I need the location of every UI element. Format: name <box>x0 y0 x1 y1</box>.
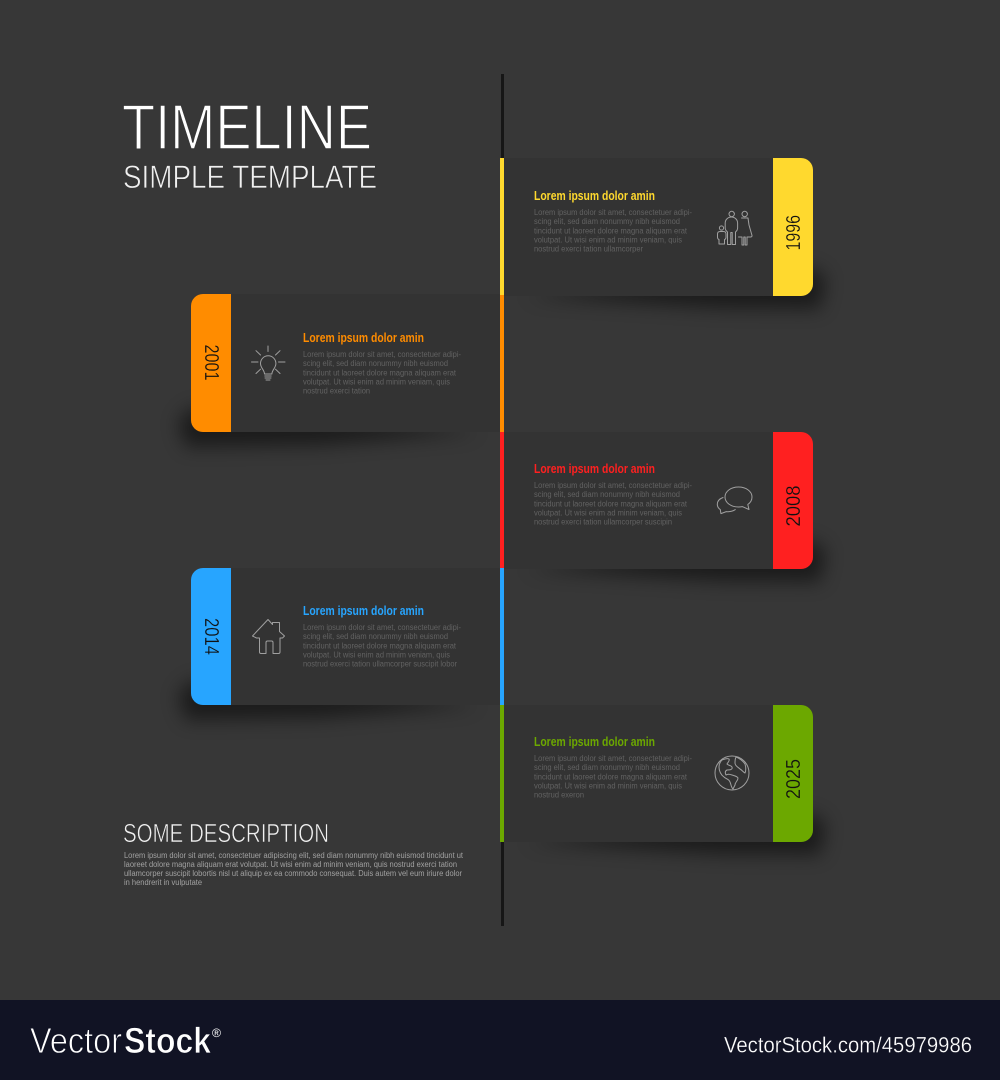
logo: VectorStock: ® <box>212 1026 221 1040</box>
text block: 2001 <box>303 350 461 396</box>
text block: 2014: volutpat. Ut wisi enim ad minim veniam, quis <box>303 650 450 660</box>
heading: 2025: Lorem ipsum dolor amin <box>534 735 655 749</box>
logo: VectorStock <box>30 1020 221 1061</box>
year tab: 2001 <box>191 294 231 432</box>
text block: 2025: scing elit, sed diam nonummy nibh euismod <box>534 763 680 772</box>
text block: 2008: tincidunt ut laoreet dolore magna aliquam erat <box>534 500 688 508</box>
description heading: SOME DESCRIPTION <box>123 818 329 848</box>
text block: 2001: nostrud exerci tation <box>303 386 370 396</box>
icon: speech bubbles <box>717 487 752 514</box>
text block: 2014: Lorem ipsum dolor sit amet, consectetuer adipi- <box>303 623 461 632</box>
year tab: 2001: 2001 <box>200 344 222 380</box>
text block: 2025: tincidunt ut laoreet dolore magna aliquam erat <box>534 772 688 782</box>
description text: in hendrerit in vulputate <box>124 878 203 887</box>
text block: 1996: Lorem ipsum dolor sit amet, consectetuer adipi- <box>534 208 692 217</box>
panel: 1996 <box>504 158 826 309</box>
text block: 2014: scing elit, sed diam nonummy nibh euismod <box>303 632 448 641</box>
text block: 1996: nostrud exerci tation ullamcorper <box>534 244 643 254</box>
icon: light bulb <box>252 346 285 380</box>
text block: 2014 <box>303 623 461 668</box>
description text: ullamcorper suscipit lobortis nisl ut aliquip ex ea commodo consequat. Duis autem vel eum iriure dolor <box>124 869 462 878</box>
logo: VectorStock: Stock <box>124 1020 212 1061</box>
text block: 2025: Lorem ipsum dolor sit amet, consectetuer adipi- <box>534 754 692 763</box>
text block: 1996: tincidunt ut laoreet dolore magna aliquam erat <box>534 226 688 236</box>
heading: 2001: Lorem ipsum dolor amin <box>303 331 424 345</box>
icon: globe <box>715 756 749 790</box>
year tab: 1996 <box>773 158 813 296</box>
text block: 2025 <box>534 754 692 800</box>
year tab: 2025: 2025 <box>783 759 805 799</box>
year tab: 2008 <box>773 432 813 569</box>
year tab: 2025 <box>773 705 813 842</box>
heading: 2014: Lorem ipsum dolor amin <box>303 604 424 618</box>
text block: 2008: volutpat. Ut wisi enim ad minim veniam, quis <box>534 508 682 518</box>
text block: 2008 <box>534 481 692 526</box>
panel: 2001 <box>178 294 500 447</box>
year tab: 2014 <box>191 568 231 705</box>
heading: 2008: Lorem ipsum dolor amin <box>534 462 655 476</box>
text block: 2001: volutpat. Ut wisi enim ad minim veniam, quis <box>303 378 450 386</box>
title: SIMPLE TEMPLATE <box>123 159 377 195</box>
logo: VectorStock: Vector <box>30 1020 122 1061</box>
text block: 2008: nostrud exerci tation ullamcorper suscipin <box>534 518 672 526</box>
panel: 2008 <box>504 432 826 582</box>
text block: 2014: nostrud exerci tation ullamcorper suscipit lobor <box>303 660 457 668</box>
description text: laoreet dolore magna aliquam erat volutpat. Ut wisi enim ad minim veniam, quis nostrud exerci tation <box>124 860 457 869</box>
text block: 1996: volutpat. Ut wisi enim ad minim veniam, quis <box>534 236 682 244</box>
text block: 2008: Lorem ipsum dolor sit amet, consectetuer adipi- <box>534 481 692 490</box>
icon: family <box>718 211 752 245</box>
text block: 2001: Lorem ipsum dolor sit amet, consectetuer adipi- <box>303 350 461 359</box>
heading: 1996: Lorem ipsum dolor amin <box>534 189 655 203</box>
year tab: 1996: 1996 <box>783 215 805 250</box>
panel: 2025 <box>504 705 826 855</box>
image id url: VectorStock.com/45979986 <box>724 1032 972 1058</box>
description text <box>124 851 464 887</box>
icon: house <box>252 620 284 654</box>
text block: 1996: scing elit, sed diam nonummy nibh euismod <box>534 217 680 226</box>
text block: 2001: scing elit, sed diam nonummy nibh euismod <box>303 359 448 368</box>
title <box>122 91 377 195</box>
text block: 2014: tincidunt ut laoreet dolore magna aliquam erat <box>303 642 457 650</box>
panel: 2014 <box>178 568 500 720</box>
year tab: 2008: 2008 <box>783 486 805 526</box>
text block: 2008: scing elit, sed diam nonummy nibh euismod <box>534 490 680 499</box>
year tab: 2014: 2014 <box>200 618 222 655</box>
footer band <box>0 1000 1000 1080</box>
text block: 2025: volutpat. Ut wisi enim ad minim veniam, quis <box>534 782 682 790</box>
text block: 2025: nostrud exeron <box>534 790 584 800</box>
text block: 2001: tincidunt ut laoreet dolore magna aliquam erat <box>303 368 457 378</box>
title: TIMELINE <box>122 91 372 163</box>
text block: 1996 <box>534 208 692 254</box>
timeline axis <box>500 74 504 926</box>
description text: Lorem ipsum dolor sit amet, consectetuer adipiscing elit, sed diam nonummy nibh euismod tincidunt ut <box>124 851 464 860</box>
